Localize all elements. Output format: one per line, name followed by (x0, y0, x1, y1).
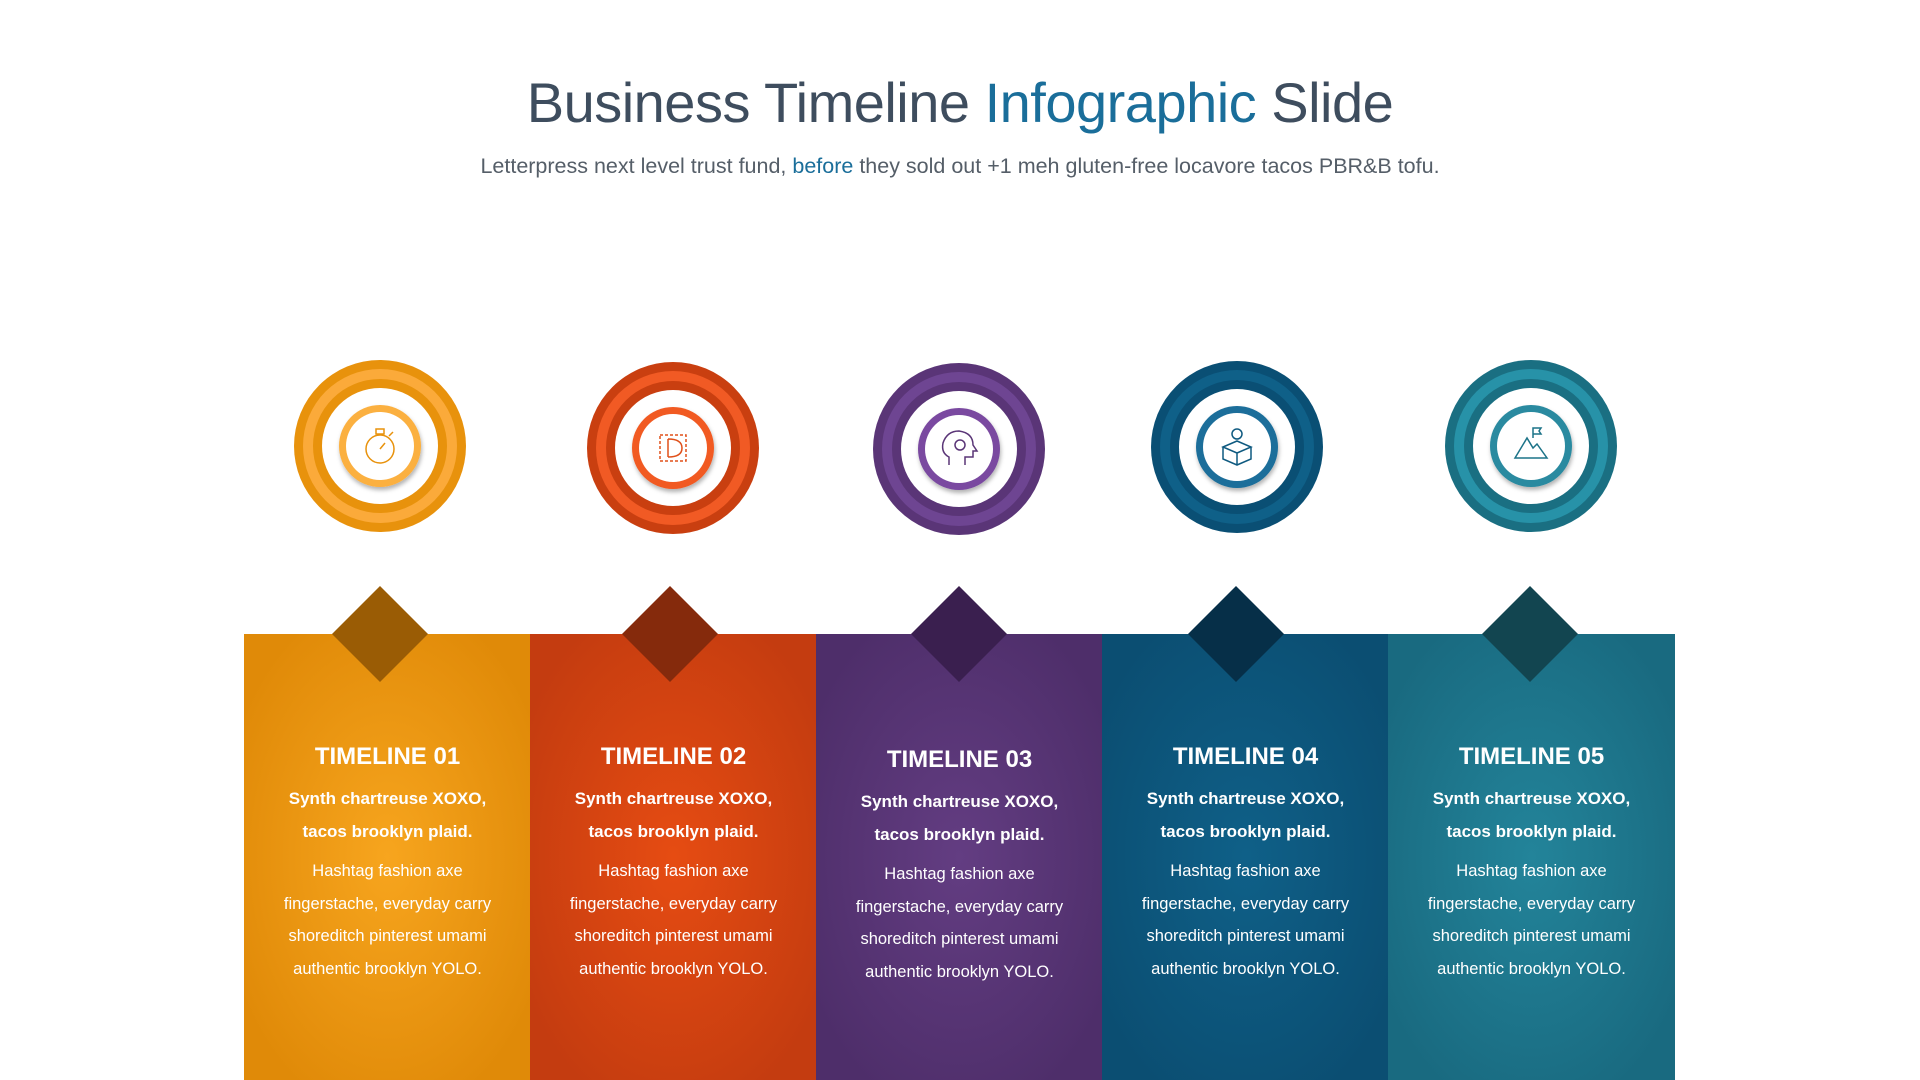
text: timeline 03: TIMELINE 03 (887, 746, 1032, 773)
panel: timeline 03 (816, 586, 1103, 1080)
text: timeline 05: TIMELINE 05 (1459, 743, 1604, 770)
panel: timeline 02 (530, 586, 817, 1080)
text: timeline 01: Hashtag fashion axe (312, 862, 463, 880)
text: timeline 03: shoreditch pinterest umami (860, 930, 1059, 948)
text: timeline 05: Hashtag fashion axe (1456, 862, 1607, 880)
text: timeline 01: shoreditch pinterest umami (288, 927, 487, 945)
text: timeline 01: tacos brooklyn plaid. (302, 822, 473, 841)
text: timeline 04: tacos brooklyn plaid. (1160, 822, 1331, 841)
text: timeline 04: fingerstache, everyday carry (1142, 894, 1349, 912)
text: timeline 03: fingerstache, everyday carry (856, 898, 1063, 916)
text: timeline 01: fingerstache, everyday carry (284, 894, 491, 912)
text: timeline 02: tacos brooklyn plaid. (588, 822, 759, 841)
panel: timeline 01 (244, 586, 531, 1080)
icon circle 01 (294, 360, 466, 532)
text: timeline 02: Synth chartreuse XOXO, (575, 789, 772, 808)
icon circle 04 (1151, 361, 1323, 533)
text: timeline 01: authentic brooklyn YOLO. (293, 960, 482, 978)
text: timeline 05: tacos brooklyn plaid. (1446, 822, 1617, 841)
text: timeline 05: fingerstache, everyday carry (1428, 894, 1635, 912)
text: timeline 02: TIMELINE 02 (601, 743, 746, 770)
text: timeline 02: authentic brooklyn YOLO. (579, 960, 768, 978)
text: timeline 03 (856, 746, 1064, 980)
text: timeline 04: shoreditch pinterest umami (1146, 927, 1345, 945)
text: timeline 05: Synth chartreuse XOXO, (1433, 789, 1630, 808)
text: timeline 05: authentic brooklyn YOLO. (1437, 960, 1626, 978)
text: timeline 01 (284, 743, 492, 978)
text: timeline 05 (1428, 743, 1636, 978)
text: timeline 01: Synth chartreuse XOXO, (289, 789, 486, 808)
icon circle 02 (587, 362, 759, 534)
text: timeline 03: tacos brooklyn plaid. (874, 825, 1045, 844)
text: timeline 05: shoreditch pinterest umami (1432, 927, 1631, 945)
text: timeline 02: Hashtag fashion axe (598, 862, 749, 880)
text: timeline 03: Hashtag fashion axe (884, 865, 1035, 883)
text: timeline 04: TIMELINE 04 (1173, 743, 1318, 770)
icon circle 05 (1445, 360, 1617, 532)
text: timeline 02: fingerstache, everyday carry (570, 894, 777, 912)
text: timeline 01: TIMELINE 01 (315, 743, 460, 770)
text: timeline 04: authentic brooklyn YOLO. (1151, 960, 1340, 978)
text: timeline 03: authentic brooklyn YOLO. (865, 962, 1054, 980)
panel: timeline 04 (1102, 586, 1389, 1080)
panel: timeline 05 (1388, 586, 1675, 1080)
text: timeline 03: Synth chartreuse XOXO, (861, 792, 1058, 811)
text: timeline 04 (1142, 743, 1350, 978)
text: timeline 04: Hashtag fashion axe (1170, 862, 1321, 880)
subtitle: Letterpress next level trust fund, before they sold out +1 meh gluten-free locavore tacos PBR&B tofu. (480, 154, 1440, 178)
text: timeline 04: Synth chartreuse XOXO, (1147, 789, 1344, 808)
title: Business Timeline Infographic Slide (527, 71, 1393, 134)
text: timeline 02 (570, 743, 778, 978)
text: timeline 02: shoreditch pinterest umami (574, 927, 773, 945)
icon circle 03 (873, 363, 1045, 535)
